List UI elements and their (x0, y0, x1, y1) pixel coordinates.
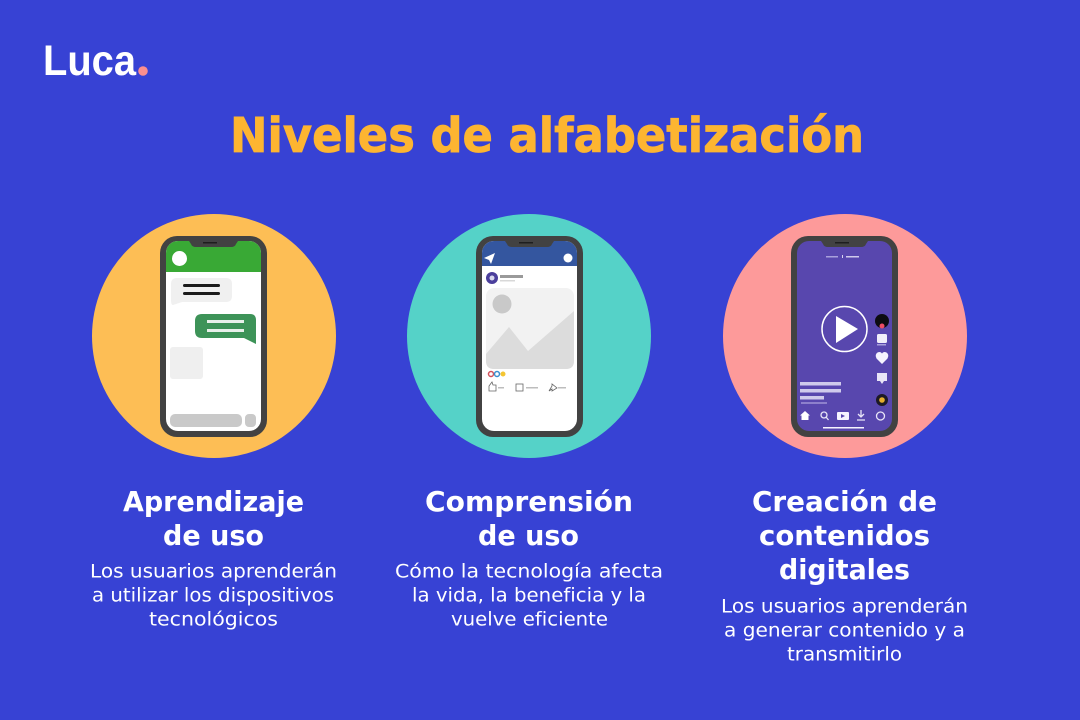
heading: de uso (163, 520, 264, 552)
icon: teal circle with social feed phone (407, 214, 651, 458)
text block: transmitirlo (787, 644, 902, 666)
heading: Aprendizaje (123, 486, 304, 518)
text block: la vida, la beneficia y la (412, 586, 646, 606)
panel: comprensión de uso (395, 214, 663, 630)
heading (123, 486, 304, 552)
text block: Los usuarios aprenderán (721, 596, 968, 618)
heading (425, 486, 633, 552)
text block (90, 562, 337, 630)
logo: Luca: Luca (43, 37, 137, 85)
panel: creación de contenidos digitales (721, 214, 968, 666)
text block: a utilizar los dispositivos (92, 586, 334, 606)
heading: Comprensión (425, 486, 633, 518)
icon: yellow circle with messaging phone (92, 214, 336, 458)
heading: Creación de (752, 486, 937, 518)
text block (395, 562, 663, 630)
heading: digitales (779, 554, 910, 586)
title: Niveles de alfabetización (230, 108, 864, 164)
heading (752, 486, 937, 586)
text block: a generar contenido y a (724, 620, 965, 642)
heading: de uso (478, 520, 579, 552)
text block: vuelve eficiente (451, 610, 608, 630)
text block: tecnológicos (149, 610, 278, 630)
icon: pink circle with video phone (723, 214, 967, 458)
text block: Los usuarios aprenderán (90, 562, 337, 582)
heading: contenidos (759, 520, 930, 552)
text block (721, 596, 968, 666)
text block: Cómo la tecnología afecta (395, 562, 663, 582)
panel: aprendizaje de uso (90, 214, 337, 630)
